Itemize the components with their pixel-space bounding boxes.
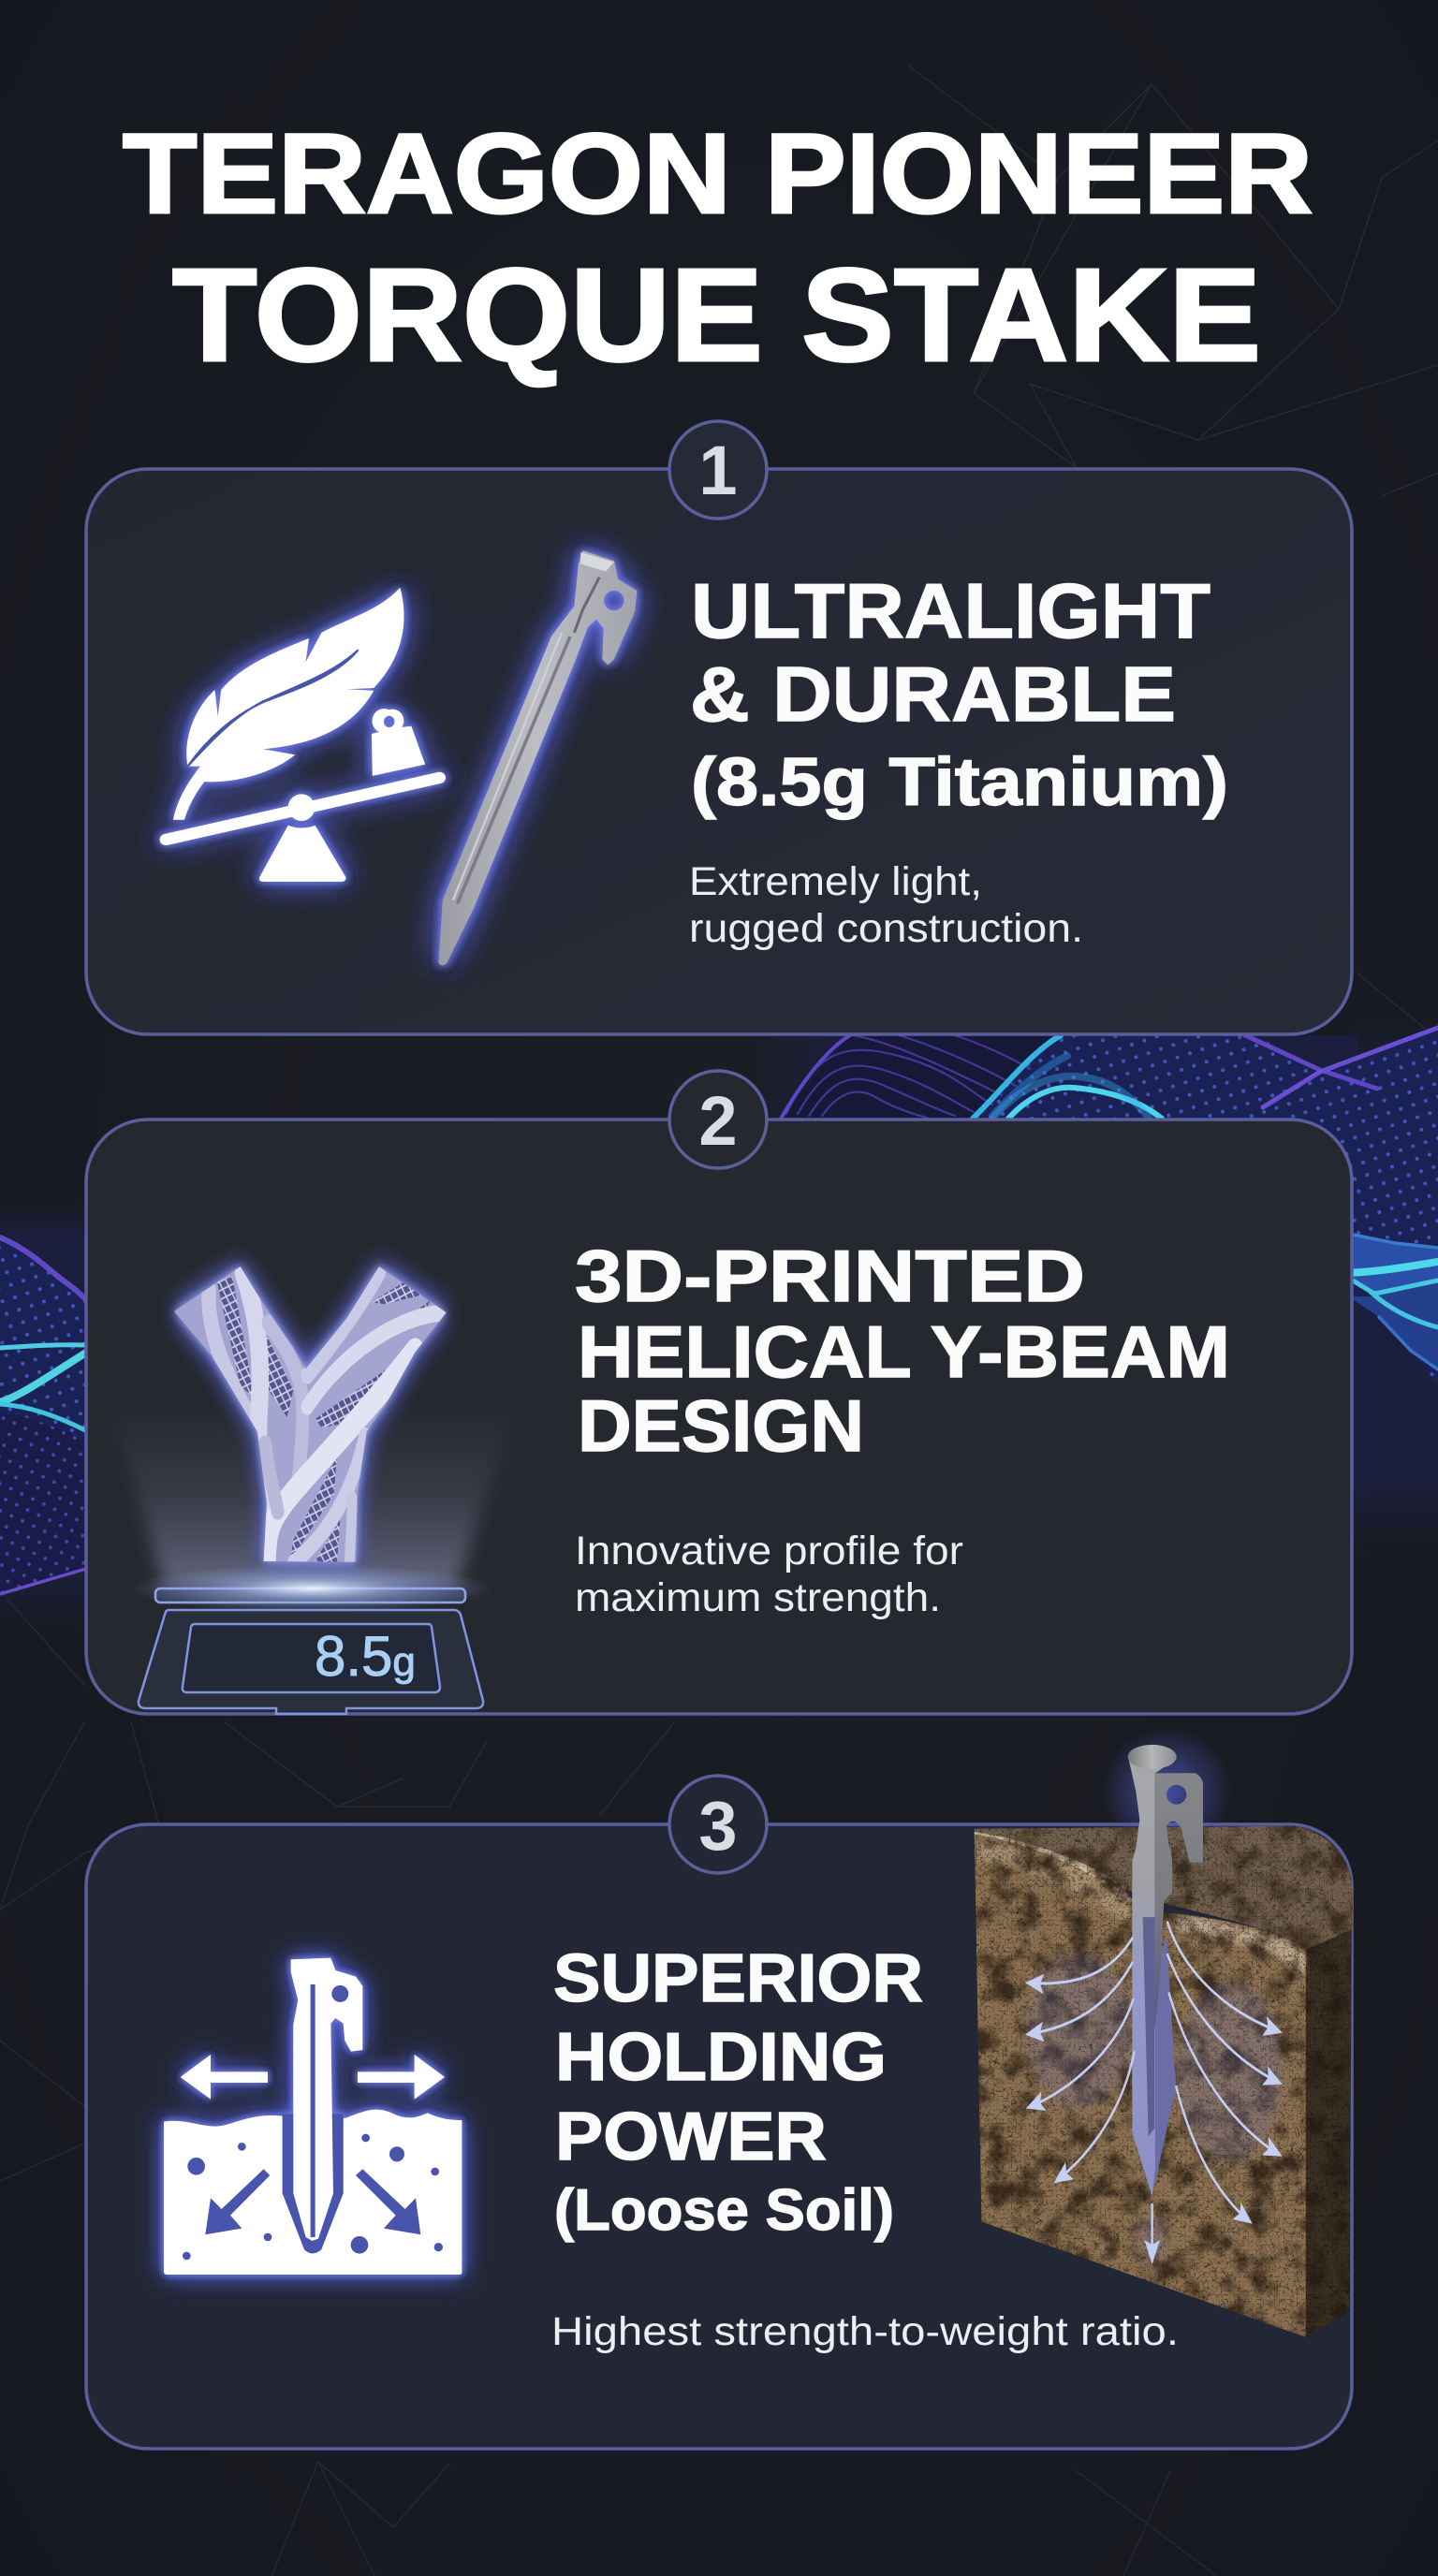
heading: & DURABLE: [690, 651, 1176, 738]
step badge 1: 1: [698, 432, 738, 509]
weight readout: 8.5g: [315, 1625, 416, 1688]
halo behind stake head: [1102, 1726, 1233, 1856]
Y-beam: [174, 1266, 447, 1563]
description: Extremely light,: [689, 859, 982, 904]
heading: ULTRALIGHT: [691, 567, 1211, 654]
panel 3 card: [86, 1824, 1352, 2449]
step badge 2: [669, 1071, 767, 1168]
panel 2: helical Y-beam: [86, 1071, 1352, 1714]
description: rugged construction.: [689, 906, 1083, 951]
panel 2 card: [86, 1120, 1352, 1714]
description: [575, 1529, 963, 1620]
title: TERAGON PIONEER: [123, 110, 1313, 237]
background wave: left edge: [0, 1237, 89, 1594]
stake: [1128, 1745, 1203, 2197]
soil block: [975, 1826, 1353, 2337]
description: Innovative profile for: [575, 1529, 963, 1573]
heading: HELICAL Y-BEAM: [578, 1310, 1230, 1393]
title: [123, 110, 1313, 388]
heading: (Loose Soil): [554, 2178, 894, 2243]
heading: 3D-PRINTED: [575, 1235, 1085, 1317]
icon: feather on balance scale: [166, 588, 439, 882]
background navy wave haze: [0, 1020, 1438, 1629]
step badge 2: 2: [698, 1082, 738, 1160]
heading: [575, 1235, 1230, 1467]
panel 3: superior holding power: [86, 1726, 1353, 2449]
digital scale: [129, 1564, 494, 1714]
step badge 1: [669, 421, 767, 519]
panel 1: ultralight and durable: [86, 421, 1352, 1034]
heading: POWER: [555, 2100, 827, 2174]
description: Highest strength-to-weight ratio.: [551, 2309, 1179, 2354]
panel 1 card: [86, 469, 1352, 1034]
blue force haze: [1027, 1954, 1283, 2262]
title: TORQUE STAKE: [172, 241, 1261, 388]
heading: (8.5g Titanium): [691, 745, 1228, 820]
step badge 3: 3: [698, 1787, 738, 1865]
description: maximum strength.: [575, 1575, 941, 1620]
icon: titanium stake: [438, 550, 637, 965]
icon: holographic Y-beam on scale: [110, 1266, 517, 1714]
heading: [690, 567, 1228, 820]
step badge 3: [669, 1776, 767, 1873]
icon: stake in soil: [164, 1958, 462, 2275]
background wave: top right strip: [780, 1025, 1438, 1385]
heading: DESIGN: [578, 1384, 864, 1467]
force arrows: [1028, 1922, 1280, 2261]
hologram light beams: [110, 1404, 517, 1587]
heading: SUPERIOR: [553, 1941, 923, 2016]
description: [689, 859, 1083, 951]
background wave: right edge: [1348, 1233, 1438, 1369]
heading: HOLDING: [555, 2020, 887, 2095]
heading: [553, 1941, 923, 2243]
soil cross-section with stake: [975, 1726, 1353, 2337]
